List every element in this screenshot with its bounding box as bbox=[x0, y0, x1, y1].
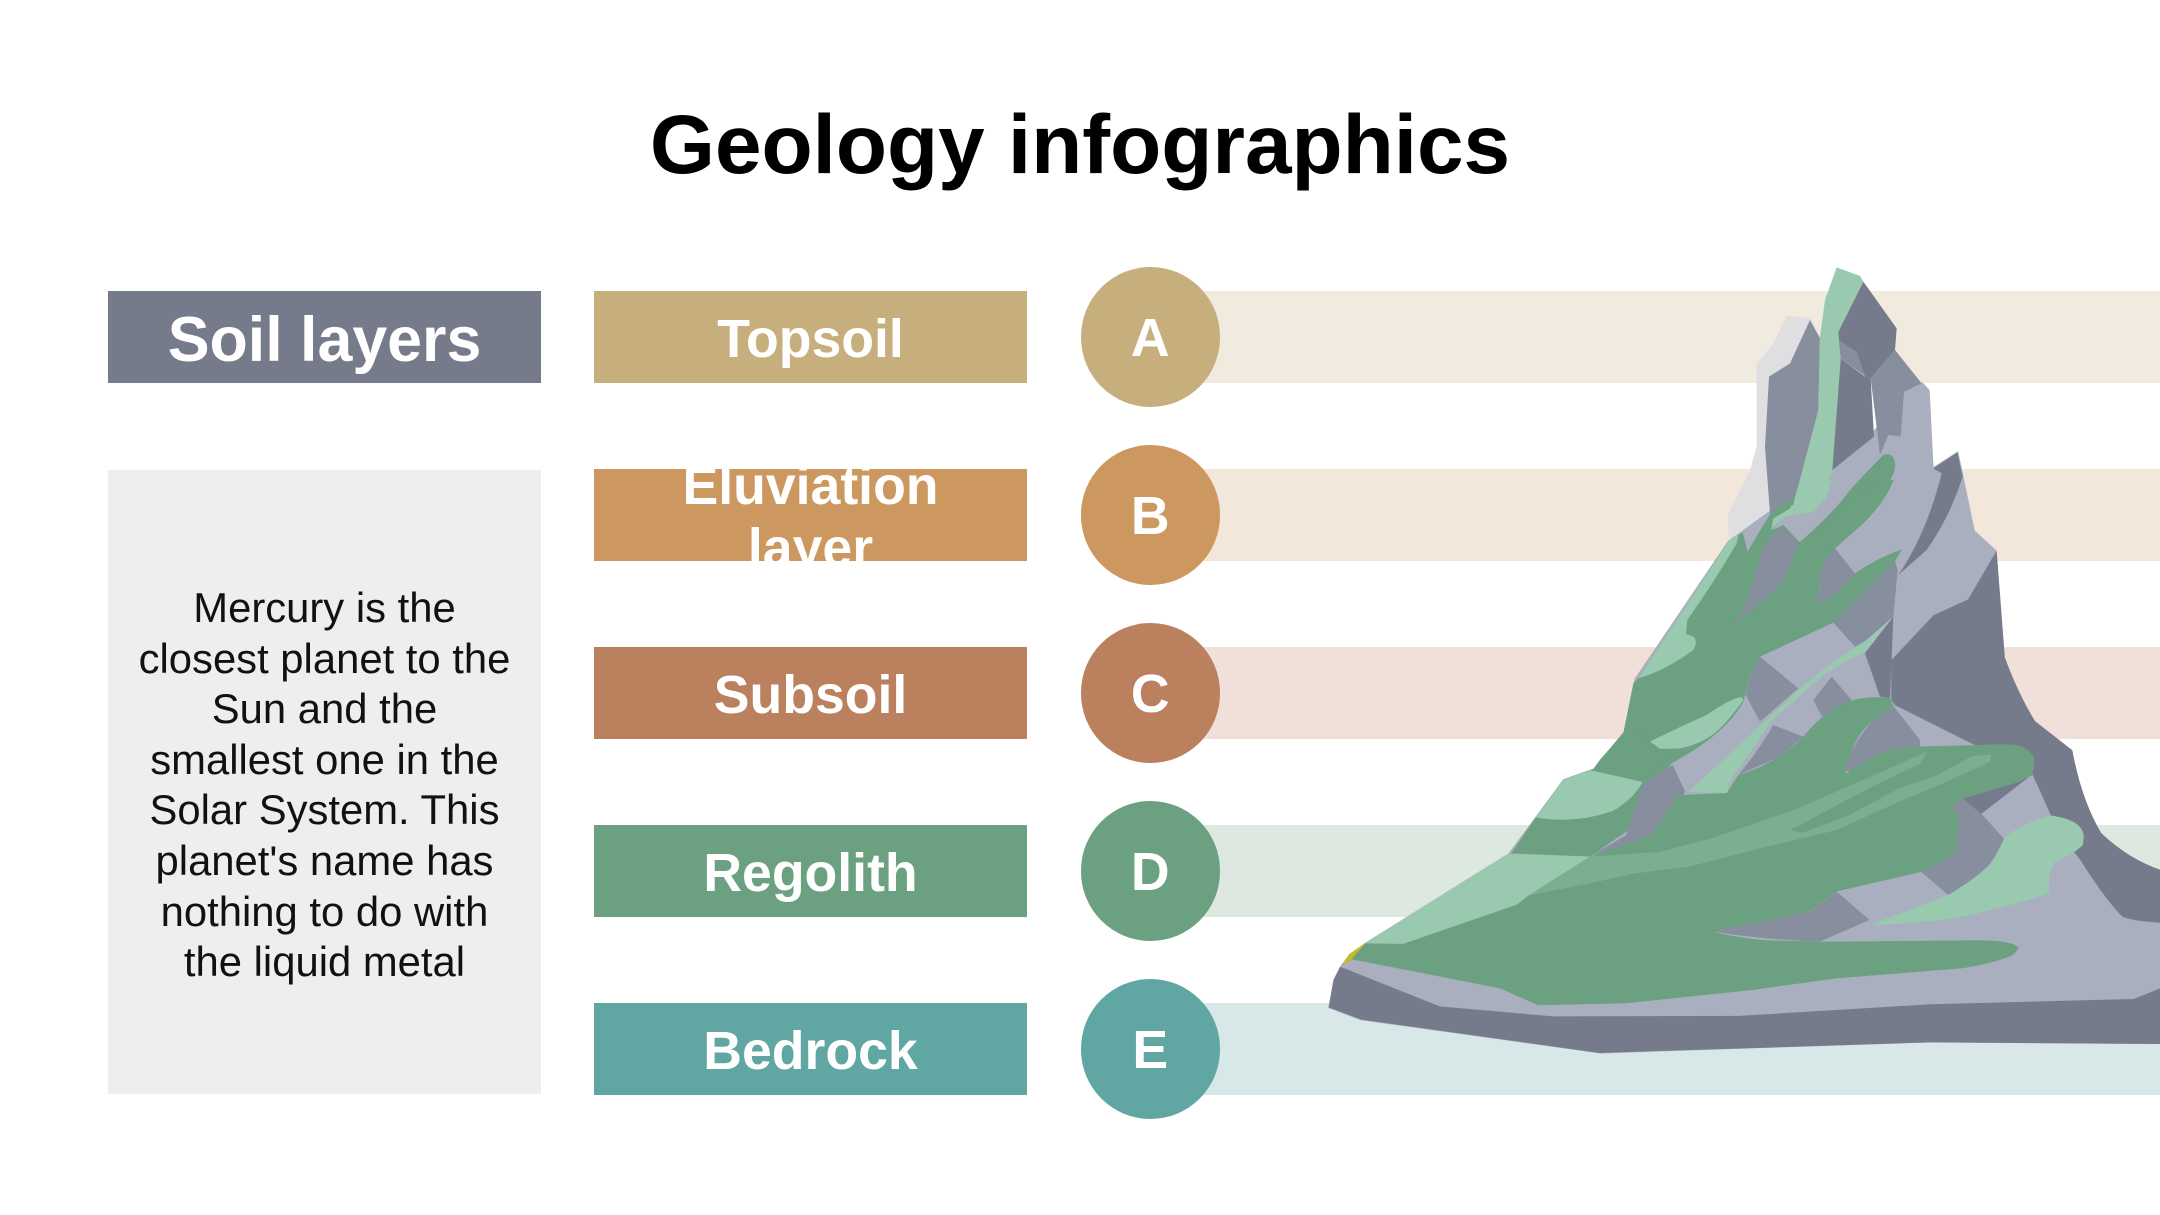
text panel: description bbox=[108, 470, 541, 1094]
circle D: D bbox=[1131, 842, 1170, 902]
green slopes bbox=[1342, 480, 2084, 1005]
label: Regolith bbox=[594, 825, 1027, 916]
label: Subsoil bbox=[594, 647, 1027, 738]
heading: soil layers: Soil layers bbox=[168, 305, 481, 375]
label: Eluviation layer: Eluviation bbox=[682, 456, 939, 516]
label: Topsoil: Topsoil bbox=[717, 309, 904, 369]
title: Geology infographics bbox=[650, 97, 1510, 191]
circle D bbox=[1080, 801, 1220, 940]
rock base strip bbox=[1329, 967, 2160, 1053]
label: Bedrock bbox=[594, 1003, 1027, 1094]
text panel: description: Sun and the bbox=[212, 685, 437, 732]
band C bbox=[1150, 647, 2160, 738]
circle B: B bbox=[1131, 486, 1170, 546]
band A bbox=[1150, 291, 2160, 382]
circle C bbox=[1080, 623, 1220, 762]
circle A bbox=[1080, 267, 1220, 406]
label: Bedrock: Bedrock bbox=[703, 1021, 918, 1081]
circle E: E bbox=[1132, 1020, 1168, 1080]
rock body bbox=[1329, 267, 2160, 1053]
circle C: C bbox=[1131, 664, 1170, 724]
label: Regolith: Regolith bbox=[703, 843, 918, 903]
label: Eluviation layer bbox=[594, 469, 1027, 560]
label: Eluviation layer: layer bbox=[748, 518, 873, 578]
band B bbox=[1150, 469, 2160, 560]
text panel: description: smallest one in the bbox=[150, 736, 499, 783]
label: Topsoil bbox=[594, 291, 1027, 382]
band D bbox=[1150, 825, 2160, 916]
heading: soil layers bbox=[108, 291, 541, 383]
text panel: description: Solar System. This bbox=[150, 786, 499, 833]
text panel: description: Mercury is the bbox=[193, 584, 456, 631]
text panel: description: the liquid metal bbox=[184, 938, 465, 985]
circle A: A bbox=[1131, 308, 1170, 368]
text panel: description: closest planet to the bbox=[139, 635, 510, 682]
circle B bbox=[1080, 445, 1220, 584]
text panel: description: nothing to do with bbox=[161, 888, 488, 935]
label: Subsoil: Subsoil bbox=[714, 665, 907, 725]
band E bbox=[1150, 1003, 2160, 1094]
text panel: description: planet's name has bbox=[156, 837, 493, 884]
circle E bbox=[1080, 979, 1220, 1118]
